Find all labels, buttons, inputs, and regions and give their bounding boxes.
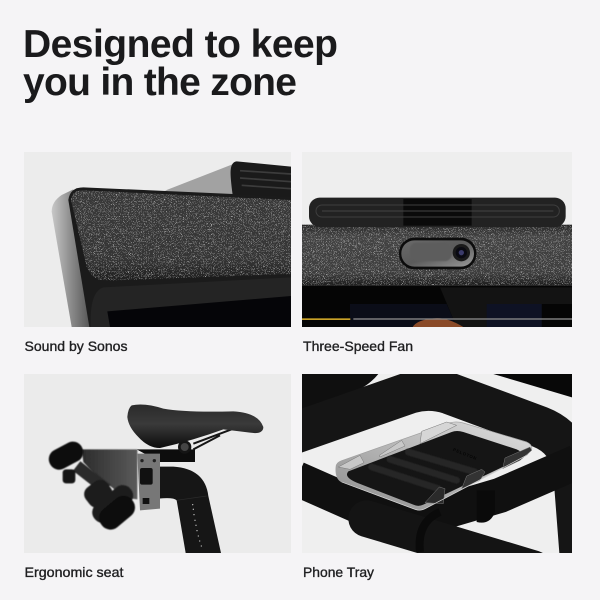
icon: silver bezel side — [52, 189, 90, 327]
panel: ergonomic seat — [24, 374, 291, 553]
icon: fan — [231, 161, 291, 200]
icon: handlebar — [348, 520, 543, 553]
panel: sound by sonos — [24, 152, 291, 327]
icon: fan — [309, 198, 566, 227]
icon: dumbbell — [48, 440, 136, 530]
panel: three-speed fan — [302, 198, 572, 327]
icon: translucent holder — [82, 449, 137, 499]
icon: seat post — [158, 467, 221, 553]
label: ergonomic seat: Ergonomic seat — [24, 564, 124, 580]
icon: lower bar — [297, 462, 577, 512]
icon: fabric band — [302, 225, 572, 285]
icon: screen — [302, 285, 572, 327]
icon: peloton logo: PELOTON — [452, 447, 478, 461]
label: phone tray: Phone Tray — [303, 564, 374, 580]
title — [23, 23, 338, 104]
icon: saddle — [127, 405, 263, 448]
icon: clip bracket — [137, 454, 160, 510]
icon: saddle rails — [137, 429, 233, 462]
icon: tray — [336, 422, 532, 510]
icon: arch tube — [290, 390, 581, 559]
icon: fabric speaker — [71, 190, 291, 281]
icon: rear mount — [165, 164, 233, 195]
label: three-speed fan: Three-Speed Fan — [303, 338, 413, 354]
icon: clamp — [476, 516, 494, 523]
label: sound by sonos: Sound by Sonos — [24, 338, 128, 354]
icon: phone pad — [347, 431, 522, 506]
icon: tray tabs — [338, 422, 532, 504]
title: you in the zone — [23, 61, 297, 104]
icon: corner tubes — [302, 374, 572, 408]
icon: screen frame — [91, 277, 291, 327]
icon: camera module — [399, 238, 476, 269]
panel: phone tray — [302, 374, 572, 553]
title: Designed to keep — [23, 23, 338, 66]
